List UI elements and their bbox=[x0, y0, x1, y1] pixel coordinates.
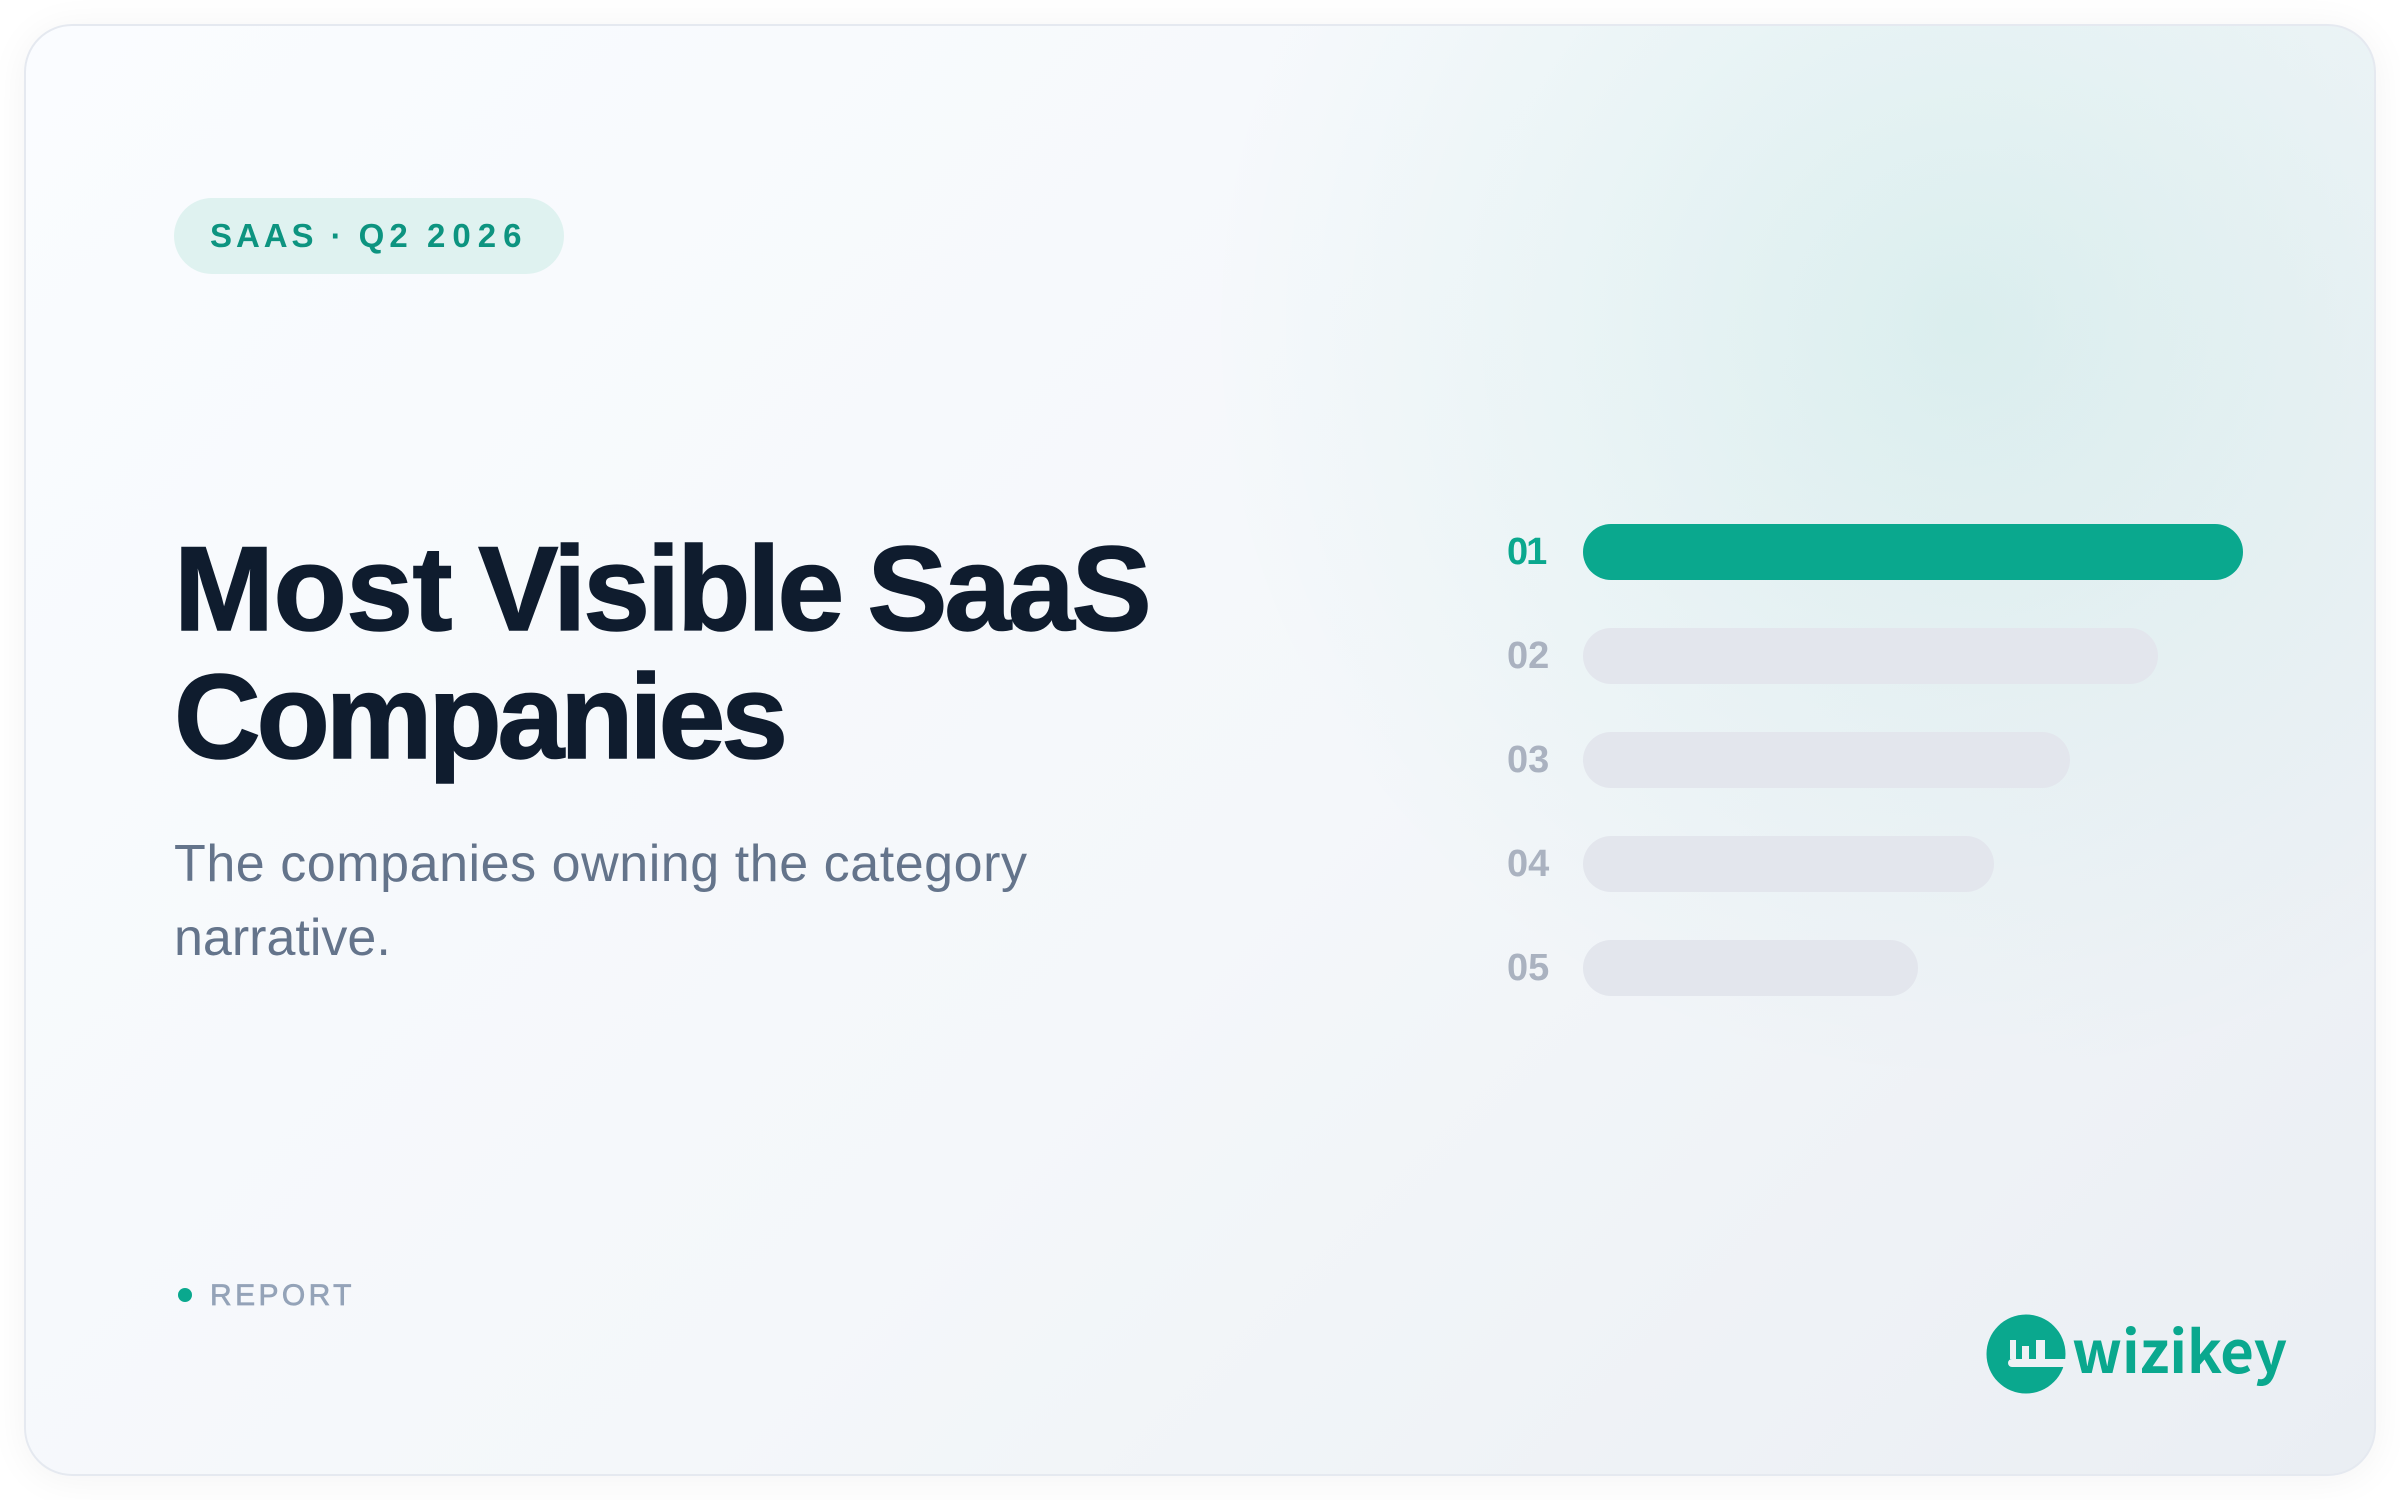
rank 02 bar bbox=[1583, 628, 2158, 684]
rank 02 label: 02 bbox=[1507, 635, 1549, 677]
rank 04 label: 04 bbox=[1507, 843, 1549, 885]
ranking chart bbox=[1507, 524, 2243, 996]
status dot bbox=[178, 1288, 192, 1302]
rank 04 bar bbox=[1583, 836, 1994, 892]
rank 05 label: 05 bbox=[1507, 947, 1549, 989]
subtitle: The companies owning the category bbox=[174, 835, 1028, 893]
report text: REPORT bbox=[210, 1279, 355, 1312]
title: Most Visible SaaS bbox=[174, 522, 1149, 656]
icon: key in circle bbox=[1986, 1314, 2066, 1394]
logo: wizikey bbox=[1986, 1306, 2287, 1394]
rank 03 bar bbox=[1583, 732, 2070, 788]
subtitle bbox=[174, 835, 1028, 967]
rank 03 label: 03 bbox=[1507, 739, 1549, 781]
rank 01 bar bbox=[1583, 524, 2243, 580]
badge text: SAAS · Q2 2026 bbox=[210, 217, 528, 254]
title bbox=[174, 522, 1149, 784]
rank 01 label: 01 bbox=[1507, 531, 1545, 573]
subtitle: narrative. bbox=[174, 909, 391, 967]
title: Companies bbox=[174, 650, 784, 784]
footer: report label bbox=[178, 1279, 355, 1312]
badge: category pill bbox=[174, 198, 564, 274]
rank 05 bar bbox=[1583, 940, 1918, 996]
wordmark: wizikey bbox=[2072, 1306, 2287, 1390]
